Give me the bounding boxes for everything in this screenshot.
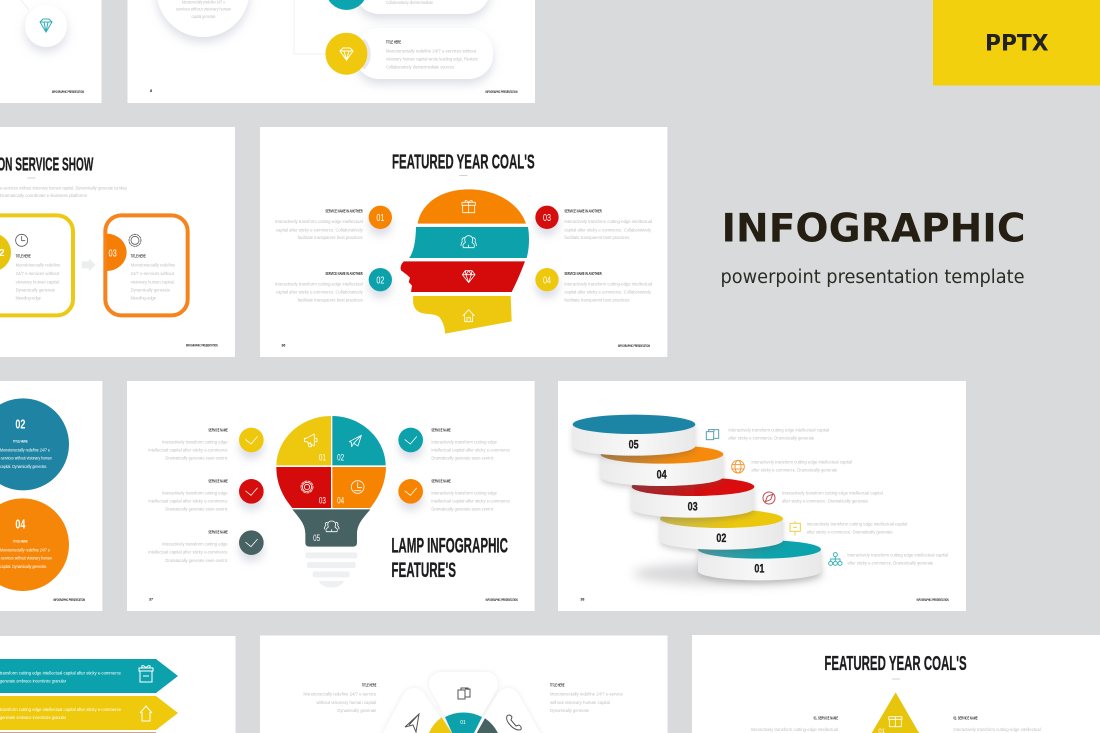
pill: teal item [326, 0, 490, 14]
callout 04: capital after sticky e-commerce. Collaboratively [564, 290, 652, 295]
check item: teal [398, 427, 510, 461]
check item: orange: SERVICE NAME [431, 479, 451, 484]
card: step 03 orange: Monotonectally redefine [131, 263, 176, 268]
donut chart [427, 712, 500, 733]
subtitle: powerpoint presentation template [720, 267, 1024, 288]
circle 02: TITLE HERE [13, 438, 28, 443]
arrow: teal [0, 659, 178, 693]
card: step 03 orange: 24/7 e-services without [131, 271, 175, 276]
circle 04: Monotonectally redefine 24/7 e [0, 547, 50, 552]
pill: teal item: Collaboratively disintermediate [386, 0, 433, 5]
item: sign icon and text: after sticky e-commerce. Dramatically generate [807, 529, 893, 534]
left text block: TITLE HERE [362, 682, 376, 688]
disc 01 [698, 540, 821, 580]
disc 03: 03 [688, 500, 698, 514]
card: step 02 yellow: visionary human capital. [16, 279, 60, 284]
panel: stacked discs slide [558, 381, 966, 611]
callout 03 [535, 206, 652, 240]
arrow: yellow: generate embrace incentivize granular [0, 715, 66, 720]
item: hierarchy icon and text: Interactively transform cutting edge intellectual capital [847, 553, 948, 558]
footer label: INFOGRAPHIC PRESENTATION [618, 344, 650, 348]
big white circle: capital generate [192, 14, 216, 19]
right label: 02. SERVICE NAME [953, 715, 978, 720]
card: step 02 yellow: bleeding-edge [16, 296, 41, 301]
footer label: INFOGRAPHIC PRESENTATION [486, 598, 518, 602]
circle 02: 02 [15, 418, 25, 432]
panel: arrows slide [0, 636, 236, 733]
disc 05: 05 [629, 438, 639, 452]
panel: badge PPTX: PPTX [985, 32, 1049, 56]
heading [391, 534, 508, 582]
icon: clock [16, 234, 28, 246]
circle 04 [0, 498, 69, 591]
check item: orange [398, 479, 510, 512]
item: globe icon and text: after sticky e-commerce. Dramatically generate [751, 468, 838, 473]
panel: head infographic slide [260, 127, 667, 357]
heading: LAMP INFOGRAPHIC [391, 534, 508, 558]
callout 01: SERVICE NAME IN ANOTHER [325, 209, 363, 214]
disc 02 [660, 509, 783, 550]
lamp: segment 01 yellow [276, 416, 331, 465]
check item: slate: Interactively transform cutting edge [162, 542, 228, 547]
check item: red [148, 479, 264, 512]
callout 03: Interactively transform cutting-edge intellectual [564, 219, 652, 224]
pill: yellow item [325, 28, 493, 79]
circle 04: TITLE HERE [13, 538, 28, 543]
item: globe icon and text [732, 460, 852, 473]
disc 03 [632, 477, 754, 518]
donut chart: 01 [460, 720, 466, 726]
item: globe icon and text: Interactively transform cutting edge intellectual capital [751, 460, 852, 465]
icon: diamond badge [25, 5, 67, 47]
check item: yellow: SERVICE NAME [208, 427, 228, 432]
callout 04: SERVICE NAME IN ANOTHER [564, 271, 602, 276]
footer label: INFOGRAPHIC PRESENTATION [486, 90, 518, 94]
right label: Interactively transform cutting-edge intellectual [953, 727, 1041, 732]
circle 02: -services without visionary human [0, 456, 52, 461]
callout 04: facilitate transparent best practices [564, 298, 630, 303]
card: step 02 yellow [0, 215, 73, 315]
pill: yellow item: visionary human capital wrote leading edge. Restore [386, 56, 479, 62]
footer label: INFOGRAPHIC PRESENTATION [53, 598, 85, 602]
check item: yellow [148, 427, 264, 461]
check item: red: Interactively transform cutting edge [162, 490, 228, 495]
panel: service show slide [0, 127, 235, 357]
panel: circles slide [0, 381, 102, 611]
lamp: segment 03 red [276, 467, 331, 508]
head: orange segment [418, 189, 526, 224]
callout 01: capital after sticky e-commerce. Collaboratively [276, 227, 363, 232]
check item: slate: SERVICE NAME [208, 530, 228, 535]
circle 04: -services without visionary human [0, 556, 52, 561]
callout 01: 01 [376, 213, 385, 224]
arrow: yellow: transform cutting edge intellectual capital after sticky e-commerce [0, 707, 121, 712]
item: compass icon and text: Interactively transform cutting edge intellectual capital [782, 491, 883, 496]
left text block: without visionary human capital [316, 700, 376, 705]
head: red segment [401, 261, 525, 292]
callout 03: facilitate transparent best practices [564, 235, 630, 240]
panel: badge PPTX [933, 0, 1100, 86]
callout 03: capital after sticky e-commerce. Collaboratively [564, 227, 652, 232]
item: compass icon and text: after sticky e-commerce. Dramatically generate [782, 499, 868, 504]
panel: top left cropped slide [0, 0, 102, 103]
footer label: INFOGRAPHIC PRESENTATION [186, 344, 218, 348]
card: step 03 orange: Dynamically generate [131, 287, 170, 292]
check item: yellow: Interactively transform cutting edge [162, 439, 228, 444]
check item: red: SERVICE NAME [208, 479, 228, 484]
petal: left [390, 700, 445, 733]
callout 04 [535, 268, 652, 303]
check item: red: intellectual capital after sticky e-commerce [148, 499, 228, 504]
panel: top center slide with pills [128, 0, 535, 103]
page number: 36 [281, 343, 285, 347]
petal: right [480, 700, 533, 733]
ground shadow [633, 562, 823, 585]
big white circle: services without visionary human [176, 6, 232, 12]
circle 04: capital. Dynamically generate. [0, 564, 47, 569]
lamp: segment 05 slate: 05 [313, 533, 320, 543]
card: step 03 orange: TITLE HERE [131, 254, 146, 259]
right label [953, 715, 1041, 732]
right text block: without visionary human capital [550, 700, 610, 705]
check item: yellow: intellectual capital after sticky e-commerce [148, 448, 228, 453]
arrow: cropped next row [0, 732, 156, 733]
page number: 37 [149, 597, 153, 601]
card: step 02 yellow: 24/7 e-services without [16, 271, 60, 276]
page number: 8 [150, 88, 153, 93]
check item: teal: Dramatically generate seen-centric [431, 456, 494, 461]
disc 05 [573, 415, 695, 456]
heading: FEATURED YEAR COAL'S [392, 152, 535, 174]
footer label: INFOGRAPHIC PRESENTATION [52, 90, 84, 94]
arrow: yellow [0, 696, 178, 730]
callout 02: Interactively transform cutting-edge intellectual [275, 281, 363, 286]
heading: FEATURE'S [391, 558, 456, 582]
lamp: segment 04 orange: 04 [337, 496, 344, 506]
arrow: teal: transform cutting edge intellectual capital after sticky e-commerce [0, 670, 121, 676]
disc 02: 02 [716, 531, 727, 545]
item: sign icon and text [790, 521, 907, 535]
footer label: INFOGRAPHIC PRESENTATION [917, 598, 949, 602]
lamp: segment 05 slate [292, 509, 370, 547]
card: step 02 yellow: TITLE HERE [16, 254, 31, 259]
panel: lamp infographic slide [127, 381, 535, 611]
lamp: segment 01 yellow: 01 [319, 453, 326, 463]
callout 02: facilitate transparent best practices [298, 298, 363, 303]
icon: yellow diamond circle [325, 33, 367, 75]
check item: teal: SERVICE NAME [431, 427, 451, 432]
circle 02: Monotonectally redefine 24/7 e [0, 447, 50, 452]
pill: yellow item: Monotonectally redefine 24/7 e-services without [386, 48, 477, 54]
title: infographic: INFOGRAPHIC [722, 206, 1026, 252]
callout 02: 02 [376, 275, 385, 286]
check item: teal: intellectual capital after sticky e-commerce [431, 448, 510, 453]
pill: yellow item: Collaboratively disintermediate sources [386, 64, 454, 70]
callout 04: Interactively transform cutting-edge intellectual [564, 281, 652, 286]
callout 01 [275, 206, 392, 240]
check item: teal: Interactively transform cutting edge [431, 439, 497, 444]
intro text: Dramatically coordinate e-business platforms [0, 193, 88, 198]
petal: top [441, 684, 486, 724]
check item: orange: intellectual capital after sticky e-commerce [431, 499, 510, 504]
callout 01: Interactively transform cutting-edge intellectual [275, 219, 363, 224]
card: step 03 orange: visionary human capital. [131, 279, 175, 284]
pyramid top [872, 692, 919, 733]
left text block: Dynamically generate [337, 708, 377, 713]
check item: orange: Dramatically generate seen-centric [431, 507, 494, 512]
item: copy icon and text: after sticky e-commerce. Dramatically generate [728, 436, 815, 441]
check item: red: Dramatically generate seen-centric [165, 507, 228, 512]
lamp: segment 04 orange [332, 467, 386, 508]
callout 02 [275, 268, 392, 303]
head: teal segment [409, 227, 529, 258]
item: hierarchy icon and text: after sticky e-commerce. Dramatically generate [847, 561, 934, 566]
card: step 02 yellow: Dynamically generate [16, 287, 55, 292]
circle 02: capital. Dynamically generate. [0, 464, 47, 469]
lamp: segment 03 red: 03 [319, 496, 326, 506]
right text block: TITLE HERE [550, 682, 565, 688]
lamp base [305, 552, 357, 588]
right text block: Dynamically generate [550, 708, 590, 713]
item: hierarchy icon and text [829, 553, 948, 566]
left label [751, 715, 838, 732]
check item: slate [148, 530, 264, 563]
left text block: Monotonectally redefine 24/7 e-service [303, 692, 377, 696]
card: step 02 yellow: Monotonectally redefine [16, 263, 61, 268]
circle 02 [0, 398, 69, 490]
left text block [303, 682, 377, 713]
pill: yellow item: TITLE HERE [386, 40, 401, 44]
callout 01: facilitate transparent best practices [298, 235, 363, 240]
callout 03: SERVICE NAME IN ANOTHER [564, 209, 602, 214]
disc 04 [601, 445, 723, 486]
panel: petals slide [260, 636, 668, 733]
callout 02: SERVICE NAME IN ANOTHER [325, 271, 363, 276]
disc 01: 01 [754, 562, 765, 576]
big white circle [156, 0, 250, 37]
check item: yellow: Dramatically generate seen-centric [165, 456, 228, 461]
callout 03: 03 [543, 213, 551, 224]
card: step 03 orange: 03 [108, 248, 117, 259]
icon: gear [129, 234, 141, 246]
callout 04: 04 [543, 275, 551, 286]
right text block [550, 682, 624, 713]
heading: ON SERVICE SHOW [0, 153, 94, 174]
disc 04: 04 [657, 467, 667, 481]
left label: 01. SERVICE NAME [814, 715, 838, 720]
lamp: segment 02 teal [332, 416, 386, 465]
item: compass icon and text [763, 491, 883, 504]
head: yellow segment [413, 296, 512, 334]
intro text [0, 185, 128, 198]
item: copy icon and text [706, 428, 829, 441]
intro text: e-services without visionary human capital. Dynamically generate turnkey [0, 185, 128, 190]
card: step 03 orange: bleeding-edge [131, 296, 156, 301]
check item: orange: Interactively transform cutting edge [431, 490, 497, 495]
callout 02: capital after sticky e-commerce. Collaboratively [276, 290, 363, 295]
panel: pyramid slide [692, 635, 1100, 733]
card: step 03 orange [105, 215, 188, 315]
left label: Interactively transform cutting-edge intellectual [751, 727, 838, 732]
check item: slate: Dramatically generate seen-centric [165, 558, 228, 563]
arrow: teal: generate embrace incentivize granular [0, 678, 66, 684]
arrow [82, 258, 96, 271]
right text block: Monotonectally redefine 24/7 e-service [550, 692, 624, 696]
circle 04: 04 [15, 517, 25, 531]
heading: FEATURED YEAR COAL'S [824, 653, 967, 675]
check item: slate: intellectual capital after sticky e-commerce [148, 550, 228, 555]
lamp: segment 02 teal: 02 [337, 453, 344, 463]
page number: 38 [580, 597, 584, 601]
item: sign icon and text: Interactively transform cutting edge intellectual capital [807, 521, 907, 526]
item: copy icon and text: Interactively transform cutting edge intellectual capital [728, 428, 829, 433]
